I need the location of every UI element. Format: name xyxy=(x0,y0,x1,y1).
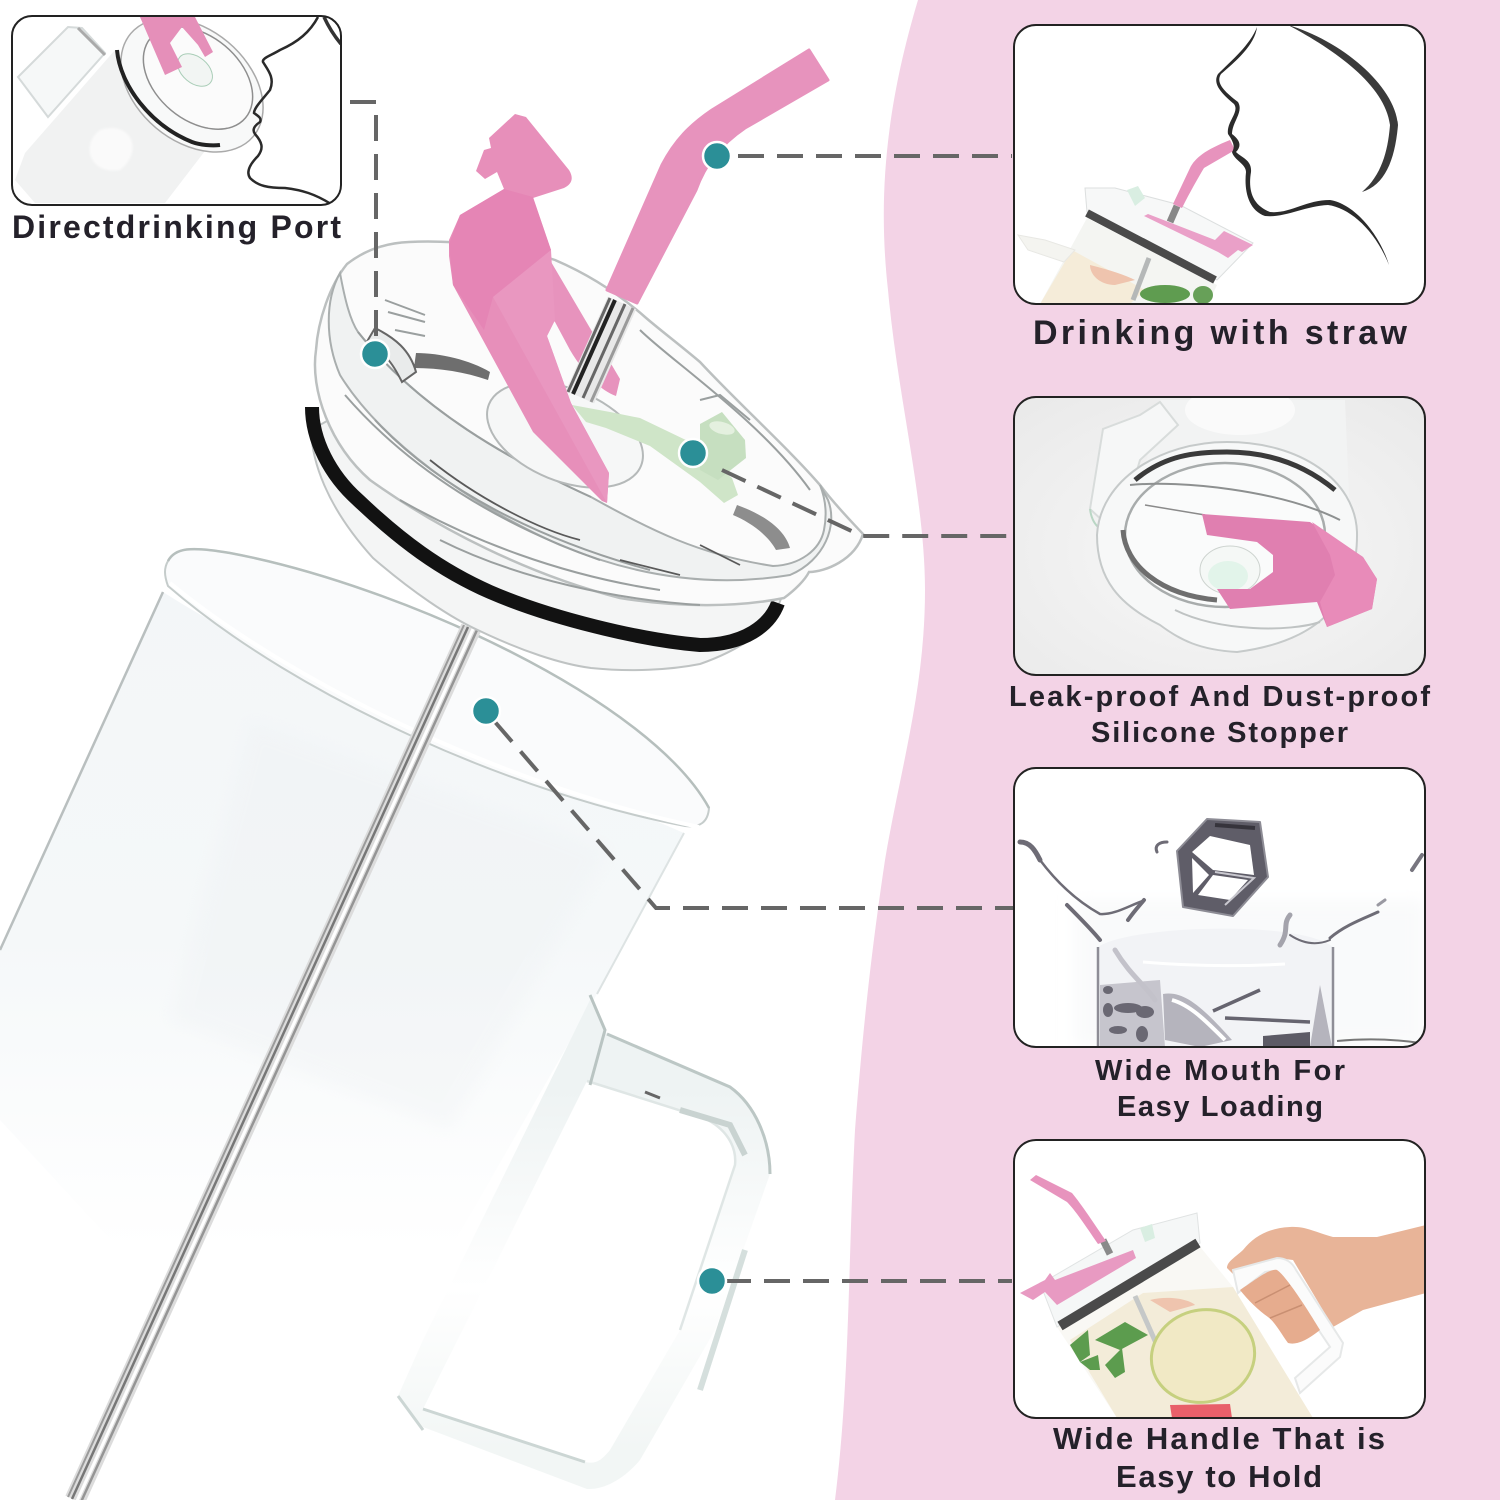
label: silicone stopper: Silicone Stopper xyxy=(1091,717,1348,749)
jug xyxy=(1140,400,1350,520)
panel: drinking with straw xyxy=(1014,25,1425,304)
hair xyxy=(1288,25,1398,192)
label: silicone stopper: Leak-proof And Dust-proof xyxy=(1009,681,1430,713)
panel: wide handle xyxy=(1014,1140,1426,1418)
steel xyxy=(1103,1240,1110,1254)
pink stopper xyxy=(140,17,213,75)
straw xyxy=(1173,140,1235,208)
lid xyxy=(1097,442,1357,652)
rim crescent xyxy=(329,273,831,580)
label: directdrinking port: Directdrinking Port xyxy=(12,209,341,245)
steel xyxy=(1170,206,1177,222)
lid xyxy=(1085,188,1253,280)
pink wavy background xyxy=(835,0,1500,1500)
label: wide handle xyxy=(1053,1421,1385,1494)
silicone plug xyxy=(572,405,746,503)
watermelon xyxy=(1170,1404,1232,1418)
glass jug xyxy=(0,549,770,1489)
panel: directdrinking port xyxy=(12,0,341,205)
mint xyxy=(1140,285,1190,303)
arm and hand xyxy=(1227,1225,1426,1327)
mint xyxy=(1070,1322,1148,1378)
pale glass backdrop xyxy=(1075,900,1425,1047)
panel: wide mouth xyxy=(1014,768,1425,1047)
marker dots xyxy=(361,142,731,1295)
straw xyxy=(1030,1175,1106,1244)
stopper xyxy=(1020,1250,1136,1305)
lower lid body xyxy=(311,380,790,670)
label: silicone stopper xyxy=(1009,681,1430,749)
black gasket xyxy=(312,407,778,645)
label: wide mouth: Easy Loading xyxy=(1117,1091,1323,1123)
label: wide mouth xyxy=(1095,1055,1345,1123)
green plug xyxy=(1200,546,1260,594)
jug handle xyxy=(18,27,105,117)
right stopper prong xyxy=(530,255,620,396)
hair xyxy=(324,17,341,44)
splash left xyxy=(1020,842,1422,1000)
lid xyxy=(1040,1213,1200,1327)
handle xyxy=(1090,402,1178,535)
jug body xyxy=(0,592,684,1250)
pink straw xyxy=(607,50,828,303)
pink stopper xyxy=(1144,214,1253,258)
steel straw lower xyxy=(68,625,477,1500)
jug body xyxy=(1058,1248,1232,1412)
label: wide handle: Easy to Hold xyxy=(1116,1459,1322,1494)
jug rim xyxy=(165,549,709,826)
mottled water xyxy=(1100,980,1165,1047)
lemon xyxy=(1150,1308,1256,1404)
label: wide mouth: Wide Mouth For xyxy=(1095,1055,1345,1087)
jug body xyxy=(15,50,208,203)
handle xyxy=(1233,1258,1343,1393)
label: wide handle: Wide Handle That is xyxy=(1053,1421,1385,1456)
panel: silicone stopper xyxy=(1014,385,1425,675)
jug handle xyxy=(398,1000,770,1489)
splash right xyxy=(1330,912,1378,938)
steel straw upper xyxy=(568,298,633,402)
label: drinking with straw: Drinking with straw xyxy=(1033,314,1408,352)
pink stopper xyxy=(449,114,609,503)
fingers xyxy=(1240,1270,1320,1344)
ice cube xyxy=(1177,819,1268,916)
jug body xyxy=(1040,218,1217,304)
pink stopper xyxy=(1202,514,1377,627)
dashed leader lines xyxy=(350,102,1014,1281)
face xyxy=(1216,27,1389,265)
lid xyxy=(120,23,264,153)
lid xyxy=(311,242,863,670)
face line xyxy=(248,17,331,204)
glass jug xyxy=(1100,1040,1332,1046)
upper lid body xyxy=(315,242,863,605)
